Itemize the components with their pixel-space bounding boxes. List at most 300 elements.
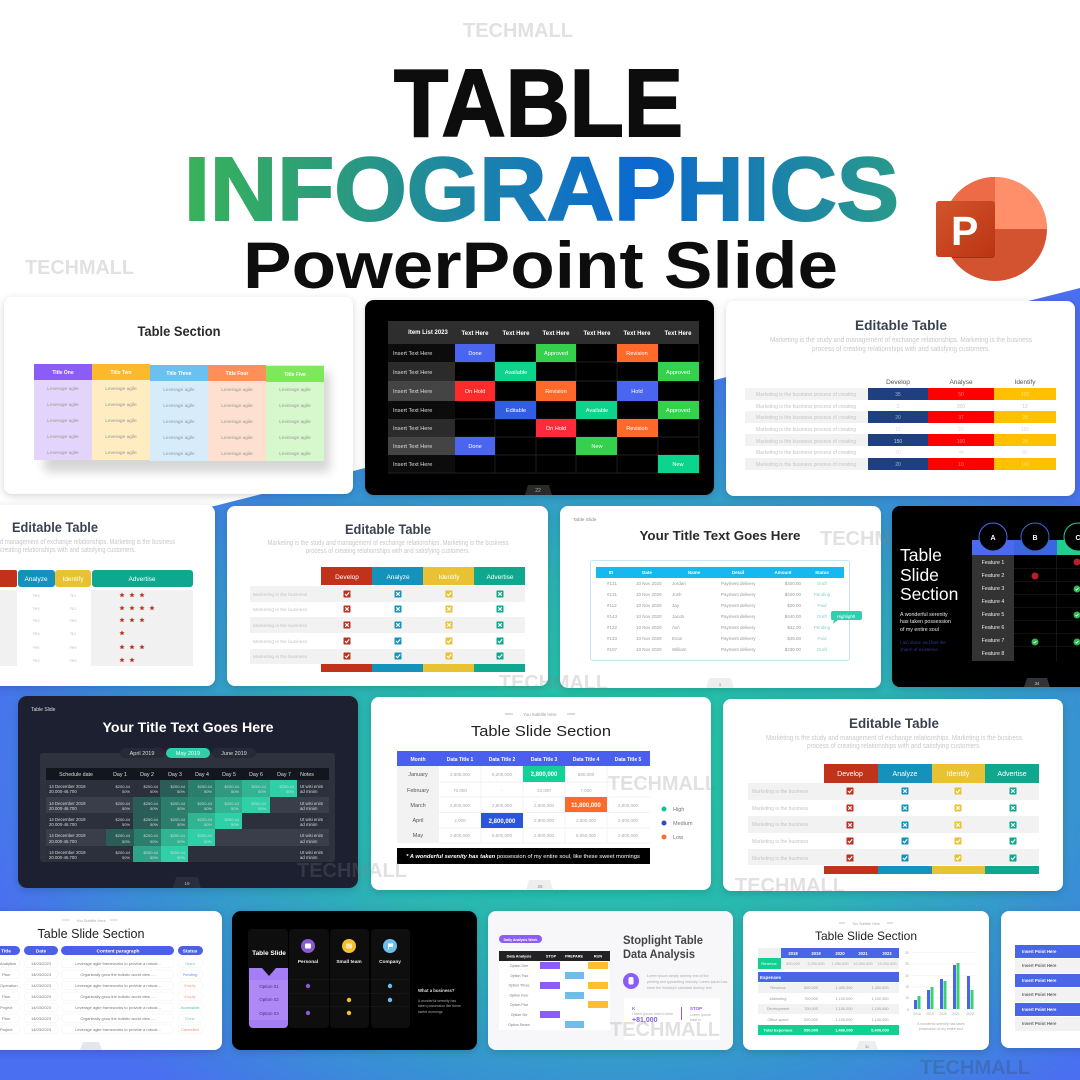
payment table: 10 Nov 2020 xyxy=(636,625,662,630)
subtitle: You Subtitle Here xyxy=(852,922,880,926)
table header: Text Here xyxy=(462,331,489,337)
date column: 20.000-46.700 xyxy=(49,855,77,860)
page tab: 19 xyxy=(184,881,190,886)
watermark: over payment slide: TECHMALL xyxy=(820,528,930,550)
payment table: Payment delivery xyxy=(721,636,756,641)
status cells: Revision xyxy=(545,389,567,395)
yes and no values: Yes xyxy=(69,645,77,650)
watermark: editable table edge: TECHMALL xyxy=(735,875,845,897)
table header xyxy=(388,321,699,344)
table header: Text Here xyxy=(665,331,692,337)
header pills: Identify xyxy=(63,576,84,583)
description xyxy=(900,612,951,633)
watermark: top: TECHMALL xyxy=(463,20,573,42)
bar chart: 2021 xyxy=(952,1012,960,1016)
description: has taken possession xyxy=(900,619,951,625)
colored table: Leverage agile xyxy=(163,451,195,457)
day values: 50% xyxy=(231,806,239,811)
payment table: #112 xyxy=(607,603,617,608)
day values: 50% xyxy=(231,822,239,827)
status cells: Done xyxy=(468,444,482,450)
feature column: Feature 5 xyxy=(982,612,1004,618)
payment table: #133 xyxy=(607,636,618,641)
status cells: On Hold xyxy=(465,389,485,395)
striped rows: 100 xyxy=(957,439,965,445)
stoplight table: Option One xyxy=(510,964,528,968)
striped rows: 20 xyxy=(958,427,964,433)
striped rows: Marketing is the business process of creating xyxy=(756,404,856,410)
striped rows: 150 xyxy=(894,439,902,445)
payment table: $20.00 xyxy=(787,603,801,608)
description: Marketing is the study and management of exchange relationships. Marketing is the business xyxy=(268,540,509,547)
stoplight table: PREPARE xyxy=(565,954,584,958)
description: Lorem ipsum simply dummy text of the xyxy=(647,974,709,978)
payment table: Evan xyxy=(672,636,683,641)
day values: $200.44 xyxy=(144,850,159,855)
day values: 50% xyxy=(258,806,266,811)
colored table: Title Four xyxy=(226,371,248,377)
day values: 50% xyxy=(122,855,130,860)
stat box: Lorem ipsum xyxy=(690,1013,711,1017)
payment table: #122 xyxy=(607,625,618,630)
panel: content paragraph table slide (cropped) xyxy=(0,911,222,1050)
stoplight table: RUN xyxy=(594,954,602,958)
bar chart: 2019 xyxy=(926,1012,934,1016)
description xyxy=(268,540,509,555)
slide label: Table Slide xyxy=(31,707,56,713)
heading: Stoplight Table xyxy=(623,933,703,947)
striped rows: 12 xyxy=(1022,404,1028,410)
finance table: 550,000 xyxy=(804,1028,819,1032)
data table: 7,000 xyxy=(580,788,592,793)
bar chart: 20 xyxy=(905,974,909,978)
data table: 2,800,000 xyxy=(618,833,639,838)
day values: 50% xyxy=(150,822,158,827)
striped rows: 80 xyxy=(1022,450,1028,456)
row text xyxy=(0,961,161,1032)
colored table: Leverage agile xyxy=(163,435,195,441)
callout: highlight: Highlight! xyxy=(837,614,855,619)
finance table: 5,400,000 xyxy=(871,1028,890,1032)
finance table: 700,000 xyxy=(804,997,818,1001)
payment table: $230.00 xyxy=(785,647,801,652)
description: printing and typesetting industry. Lorem Ipsum has xyxy=(647,980,727,984)
schedule table: Day 2 xyxy=(140,772,154,778)
notes column xyxy=(300,784,324,860)
panel: dark feature comparison slide xyxy=(892,506,1080,687)
date column: 14 December 2019 xyxy=(49,801,86,806)
column panels xyxy=(248,929,410,1028)
description xyxy=(0,539,175,554)
payment table: Josh xyxy=(672,592,682,597)
heading: Data Analysis xyxy=(623,947,695,961)
description: A wonderful serenity xyxy=(900,612,948,618)
bottom color bar xyxy=(321,664,525,672)
purple option column: Option 03 xyxy=(259,1011,279,1016)
stacked rows xyxy=(1015,945,1080,1031)
status marks xyxy=(1032,558,1080,646)
date column: 20.000-46.700 xyxy=(49,839,77,844)
column labels xyxy=(298,959,401,965)
row label column xyxy=(388,344,455,473)
description: process of creating relationships with and satisfying customers. xyxy=(306,548,470,555)
data table: Data Title 4 xyxy=(573,757,600,763)
page tab: 34 xyxy=(1034,681,1040,686)
yes and no values: Yes xyxy=(69,618,77,623)
data table: 2,800,000 xyxy=(534,833,555,838)
bottom color bar xyxy=(824,866,1039,874)
payment table: Jay xyxy=(672,603,680,608)
status labels: Cancelled xyxy=(181,1027,199,1032)
data table: 2,800,000 xyxy=(618,818,639,823)
colored table: Leverage agile xyxy=(105,450,137,456)
schedule table: Day 4 xyxy=(195,772,209,778)
data table: Data Title 1 xyxy=(447,757,474,763)
heading: Editable Table xyxy=(12,519,98,535)
day values: 50% xyxy=(231,789,239,794)
legend: High xyxy=(673,807,684,813)
finance table: 2021 xyxy=(858,951,868,956)
day values: 50% xyxy=(204,806,212,811)
header pills: Advertise xyxy=(128,576,156,583)
schedule panel xyxy=(40,753,335,862)
colored table: Title Two xyxy=(110,370,132,376)
striped rows: Marketing is the business process of creating xyxy=(756,439,856,445)
row text: Plan xyxy=(2,972,10,977)
data table xyxy=(397,751,650,843)
panel: Stoplight Table slide xyxy=(488,911,733,1050)
column circles xyxy=(979,523,1080,551)
heading: Section xyxy=(900,584,958,604)
striped rows: 20 xyxy=(895,415,901,421)
day values: 50% xyxy=(122,806,130,811)
status cells: Available xyxy=(586,408,608,414)
finance table: 2020 xyxy=(835,951,845,956)
data table: 2,800,000 xyxy=(489,819,516,825)
feature column: Feature 8 xyxy=(982,651,1004,657)
subtitle: You Subtitle Here xyxy=(523,712,557,717)
striped rows: 28 xyxy=(1022,439,1028,445)
heading: Slide xyxy=(900,565,939,585)
colored table: Leverage agile xyxy=(105,402,137,408)
bar chart: 25 xyxy=(905,962,909,966)
heading: Table Slide Section xyxy=(815,929,917,943)
watermark: data table: TECHMALL xyxy=(608,773,717,795)
watermark: lower payment slide edge: TECHMALL xyxy=(499,672,608,694)
day values: $200.44 xyxy=(144,801,159,806)
watermark: stoplight slide: TECHMALL xyxy=(610,1019,720,1041)
icon: company xyxy=(383,939,397,953)
finance table: 500,000 xyxy=(786,962,800,966)
colored table: Leverage agile xyxy=(105,386,137,392)
stacked rows: Insert Point Here xyxy=(1022,1007,1057,1012)
feature column: Feature 6 xyxy=(982,625,1004,631)
panel: payment table slide xyxy=(560,506,881,688)
day values: $200.44 xyxy=(171,784,186,789)
heading xyxy=(623,933,703,961)
data table: April xyxy=(412,818,424,824)
description: d management of exchange relationships. Marketing is the business xyxy=(0,539,175,546)
legend xyxy=(662,806,693,841)
bar chart: 10 xyxy=(905,996,909,1000)
stat box: total to xyxy=(690,1018,701,1022)
heading: Editable Table xyxy=(345,521,431,537)
heading xyxy=(900,545,958,604)
feature column: Feature 2 xyxy=(982,573,1004,579)
payment table: Payment delivery xyxy=(721,592,756,597)
data table: 2,800,000 xyxy=(492,803,513,808)
striped rows: 100 xyxy=(1021,392,1029,398)
subtitle xyxy=(62,919,118,923)
rows: Marketing is the business xyxy=(752,806,809,812)
header xyxy=(824,764,1039,783)
status cells: Hold xyxy=(631,389,643,395)
color header band xyxy=(972,540,1080,555)
colored table: Leverage agile xyxy=(47,434,79,440)
day values: 50% xyxy=(122,839,130,844)
schedule table: Notes xyxy=(300,772,314,778)
colored table: Leverage agile xyxy=(279,387,311,393)
day values: 50% xyxy=(122,822,130,827)
header pills xyxy=(0,570,193,587)
page tab: 26 xyxy=(537,884,543,889)
month tabs: May 2019 xyxy=(176,751,200,757)
data table: 70,000 xyxy=(453,788,467,793)
month tabs xyxy=(120,748,256,758)
row text: Leverage agile frameworks to provide a robust... xyxy=(75,961,161,966)
row lines xyxy=(289,980,410,1006)
date column: 14 December 2019 xyxy=(49,850,86,855)
day values: $200.44 xyxy=(116,833,131,838)
day values: 50% xyxy=(150,806,158,811)
data table: 880,000 xyxy=(578,772,595,777)
yes and no values: Yes xyxy=(32,631,40,636)
legend: Low xyxy=(673,835,683,841)
status cells xyxy=(455,344,699,473)
day values: 50% xyxy=(177,855,185,860)
description: of my entire soul xyxy=(900,627,939,633)
bar chart: 15 xyxy=(905,985,909,989)
striped rows: Marketing is the business process of creating xyxy=(756,427,856,433)
day values: 50% xyxy=(150,839,158,844)
panel: dark pricing comparison slide xyxy=(232,911,477,1050)
watermark: schedule slide edge: TECHMALL xyxy=(297,860,407,882)
colored table: Leverage agile xyxy=(279,419,311,425)
rows: Marketing is the business xyxy=(752,789,809,795)
column labels: Small team xyxy=(336,959,362,965)
quote xyxy=(900,640,946,652)
page tab xyxy=(526,880,553,890)
panel: Editable Table with colored bars xyxy=(726,301,1075,496)
finance table: 1,100,000 xyxy=(872,1007,888,1011)
finance table: Office space xyxy=(767,1018,789,1022)
schedule table: Day 3 xyxy=(168,772,182,778)
feature column: Feature 3 xyxy=(982,586,1004,592)
day values: 50% xyxy=(204,822,212,827)
bar chart: 2020 xyxy=(939,1012,947,1016)
heading: Table Section: Table Section xyxy=(138,323,220,339)
row text: Organically grow the holistic world view .... xyxy=(80,1016,156,1021)
title: INFOGRAPHICS: INFOGRAPHICS xyxy=(184,140,899,240)
row label column: Insert Text Here xyxy=(393,351,432,357)
colored table: Leverage agile xyxy=(279,451,311,457)
stoplight table: Option Two xyxy=(510,974,528,978)
feature column xyxy=(972,555,1014,661)
row text: 14/03/2023 xyxy=(31,961,52,966)
side text: sweet mornings xyxy=(418,1010,443,1014)
grid lines xyxy=(388,344,699,473)
notes column: ad minim xyxy=(300,855,318,860)
bar chart: 2022 xyxy=(966,1012,974,1016)
day values: 50% xyxy=(177,806,185,811)
side text xyxy=(418,988,461,1014)
data table: Month xyxy=(410,757,426,763)
callout: highlight xyxy=(831,611,862,624)
data table: May xyxy=(413,833,423,839)
status cells: Editable xyxy=(506,408,526,414)
day values: 50% xyxy=(177,789,185,794)
finance table: 1,100,000 xyxy=(872,1018,888,1022)
row text: Operation xyxy=(0,983,18,988)
description xyxy=(770,335,1032,353)
page tab xyxy=(856,1041,878,1050)
day values: $200.44 xyxy=(198,801,213,806)
schedule table: Schedule date xyxy=(59,772,93,778)
heading: Your Title Text Goes Here xyxy=(102,719,274,735)
striped rows: 15 xyxy=(895,427,901,433)
payment table: #107 xyxy=(607,647,618,652)
bar chart: 2018 xyxy=(913,1012,921,1016)
finance table: 200,000 xyxy=(804,1018,818,1022)
notes column: ad minim xyxy=(300,789,318,794)
status labels: Accessible xyxy=(180,1005,200,1010)
striped rows: 1 xyxy=(897,404,900,410)
striped rows: 35 xyxy=(895,392,901,398)
row label column: Insert Text Here xyxy=(393,426,432,432)
finance table: 2019 xyxy=(811,951,821,956)
notes column: Ut wisi enim xyxy=(300,784,324,789)
day values: $200.44 xyxy=(171,801,186,806)
header pills: Content paragraph xyxy=(97,948,140,954)
finance table: 10,000,000 xyxy=(853,962,873,966)
schedule table: Day 5 xyxy=(222,772,236,778)
stoplight table: Option Six xyxy=(511,1013,527,1017)
rows: Marketing is the business xyxy=(253,607,308,613)
row label column: Insert Text Here xyxy=(393,444,432,450)
table header: Text Here xyxy=(543,331,570,337)
payment table: Name xyxy=(688,570,701,575)
payment table: Detail xyxy=(732,570,744,575)
payment table xyxy=(590,560,850,660)
purple option column: Option 02 xyxy=(259,997,279,1002)
day values: 50% xyxy=(122,789,130,794)
finance table: Expenses xyxy=(760,975,782,980)
panel: Insert Point Here slide (cropped) xyxy=(1001,911,1080,1048)
row text: Plan xyxy=(2,994,10,999)
icon: personal xyxy=(301,939,315,953)
colored table: Leverage agile xyxy=(105,434,137,440)
rows: Marketing is the business xyxy=(253,654,308,660)
tag pill: Daily Analysis Week xyxy=(504,938,537,942)
status cells: Done xyxy=(468,351,482,357)
icon: PowerPoint logo: P xyxy=(951,208,978,254)
row label column: Insert Text Here xyxy=(393,370,432,376)
gradient background wedge xyxy=(0,288,1080,1080)
day values: $200.44 xyxy=(116,801,131,806)
colored table: Leverage agile xyxy=(163,403,195,409)
icon: PowerPoint logo xyxy=(936,177,1047,281)
striped rows xyxy=(745,388,1056,470)
payment table: Date xyxy=(642,570,652,575)
payment table: $420.00 xyxy=(785,592,801,597)
purple option column: Option 01 xyxy=(259,984,279,989)
colored table: Title Five xyxy=(284,372,306,378)
stoplight table: Option Four xyxy=(510,994,529,998)
date column: 20.000-46.700 xyxy=(49,806,77,811)
colored table: Leverage agile xyxy=(221,451,253,457)
description: Marketing is the study and management of exchange relationships. Marketing is the business xyxy=(770,335,1032,344)
day values: $200.44 xyxy=(116,850,131,855)
colored table: Leverage agile xyxy=(47,450,79,456)
heading: Your Title Text Goes Here xyxy=(640,528,800,543)
status cells: Revision xyxy=(626,426,648,432)
panel: Editable Table with checkboxes xyxy=(227,506,548,686)
stoplight table xyxy=(499,951,610,1030)
green cells xyxy=(106,780,297,862)
finance table: Development xyxy=(767,1007,790,1011)
day values: $200.44 xyxy=(198,784,213,789)
heading: Table Slide Section xyxy=(38,926,144,941)
page tab: 22 xyxy=(535,488,541,494)
row text: 14/03/2023 xyxy=(31,983,52,988)
status cells: Revision xyxy=(626,351,648,357)
notes column: ad minim xyxy=(300,806,318,811)
row text: Leverage agile frameworks to provide a robust... xyxy=(75,983,161,988)
payment table: $400.00 xyxy=(785,581,801,586)
header: Identify xyxy=(947,771,970,778)
colored table: Title Three xyxy=(166,371,192,377)
stoplight table: Option Seven xyxy=(508,1023,530,1027)
rows: Marketing is the business xyxy=(752,856,809,862)
icon: hand xyxy=(623,973,639,989)
finance table: 3,200,000 xyxy=(808,962,824,966)
striped rows: Marketing is the business process of creating xyxy=(756,462,856,468)
finance table: 15,000,000 xyxy=(877,962,897,966)
schedule table: Day 7 xyxy=(277,772,291,778)
row text: Plan xyxy=(2,1016,10,1021)
finance table: 1,100,000 xyxy=(836,1007,852,1011)
stoplight table: Data Analysis xyxy=(507,954,531,958)
slide label: Table Slide xyxy=(573,517,597,523)
header pills: Analyze xyxy=(24,576,48,583)
description: process of creating relationships with and satisfying customers. xyxy=(812,344,990,353)
header: Identify xyxy=(439,574,460,581)
row text: 14/03/2023 xyxy=(31,1027,52,1032)
date column: 14 December 2019 xyxy=(49,784,86,789)
stacked rows: Insert Point Here xyxy=(1022,949,1057,954)
row text: 14/03/2023 xyxy=(31,1005,52,1010)
subtitle: You Subtitle Here xyxy=(76,919,106,923)
yes and no values: No xyxy=(70,606,76,611)
row text: Organically grow the holistic world view .... xyxy=(80,994,156,999)
purple option column xyxy=(249,968,288,1028)
heading: Editable Table xyxy=(849,715,939,731)
page tab xyxy=(1024,678,1050,687)
day values: 50% xyxy=(177,839,185,844)
row pills xyxy=(0,959,203,1034)
striped rows: Marketing is the business process of creating xyxy=(756,450,856,456)
status labels: Empty xyxy=(184,994,196,999)
